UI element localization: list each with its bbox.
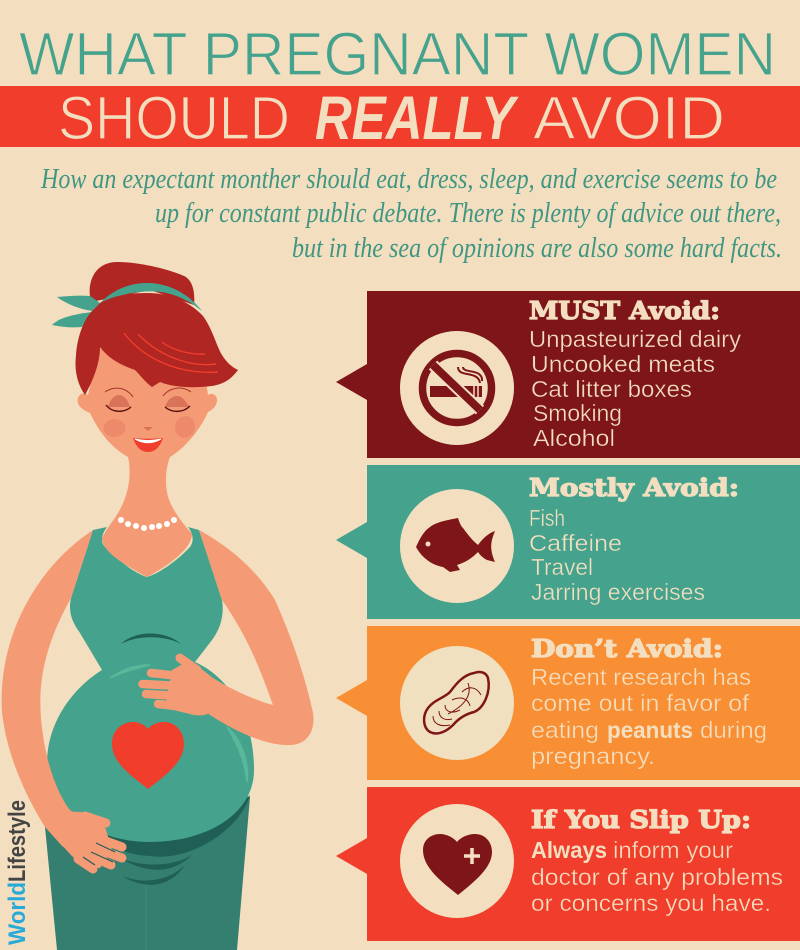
heading: Don’t Avoid: [531, 634, 723, 663]
hair band and bow [52, 283, 202, 327]
list: Cat litter boxes [531, 376, 692, 402]
front hair [75, 293, 238, 395]
hair bun [90, 262, 194, 305]
icon: no smoking [400, 331, 514, 445]
belly [47, 661, 254, 842]
nose [143, 427, 153, 431]
belly highlights [110, 665, 248, 782]
list [529, 505, 705, 605]
title banner: AVOID [533, 84, 725, 152]
heart on belly [112, 722, 184, 789]
list: Alcohol [533, 425, 615, 451]
body text: doctor of any problems [531, 864, 783, 890]
heading: MUST Avoid: [529, 296, 720, 325]
panel: if you slip up [336, 787, 800, 941]
heading: Mostly Avoid: [529, 473, 739, 502]
panel: don't avoid [336, 626, 800, 780]
body text [531, 664, 767, 769]
list: Uncooked meats [531, 351, 715, 377]
logo: WorldLifestyle: Lifestyle [4, 800, 31, 882]
title banner [0, 84, 800, 152]
eyes and brows [105, 388, 191, 411]
list: Travel [531, 554, 593, 580]
list: Jarring exercises [531, 579, 705, 605]
heading: If You Slip Up: [531, 805, 751, 834]
list: Fish [529, 505, 565, 531]
waist crease [121, 634, 181, 644]
logo: WorldLifestyle: World [4, 882, 31, 945]
logo: WorldLifestyle [4, 800, 31, 945]
body text: or concerns you have. [531, 890, 771, 916]
title banner: REALLY [315, 84, 519, 152]
dress top [70, 527, 223, 690]
left arm [2, 530, 100, 847]
pregnant woman illustration [2, 262, 314, 950]
skirt folds [120, 855, 192, 885]
cheeks [104, 413, 198, 441]
icon: heart with plus [400, 804, 514, 918]
body text [531, 837, 783, 916]
list [529, 326, 742, 451]
title banner: SHOULD [58, 84, 290, 152]
hair strands [124, 333, 218, 372]
upper hand [142, 658, 213, 715]
lower hand [50, 812, 122, 869]
icon: fish [400, 489, 514, 603]
mouth [133, 438, 163, 452]
skirt seam [145, 880, 147, 950]
body text: pregnancy. [531, 743, 655, 769]
belly shadow [90, 795, 250, 857]
pearl necklace [118, 517, 177, 531]
body text: inform your [613, 837, 733, 863]
belly left shade [47, 763, 72, 818]
body text: eating [531, 717, 599, 743]
panel: mostly avoid [336, 465, 800, 619]
neck and face [78, 340, 217, 577]
body text: Always [531, 837, 607, 863]
icon: peanut [400, 646, 514, 760]
skirt [45, 780, 250, 950]
list: Unpasteurized dairy [529, 326, 742, 352]
panel: must avoid [336, 291, 800, 458]
body text: peanuts [607, 717, 693, 743]
right arm [199, 530, 314, 745]
body text: Recent research has [531, 664, 751, 690]
body text: come out in favor of [531, 690, 750, 716]
body text: during [700, 717, 767, 743]
list: Caffeine [529, 530, 622, 556]
title line 1: WHAT PREGNANT WOMEN [19, 20, 776, 88]
list: Smoking [533, 400, 622, 426]
intro text [40, 164, 782, 264]
